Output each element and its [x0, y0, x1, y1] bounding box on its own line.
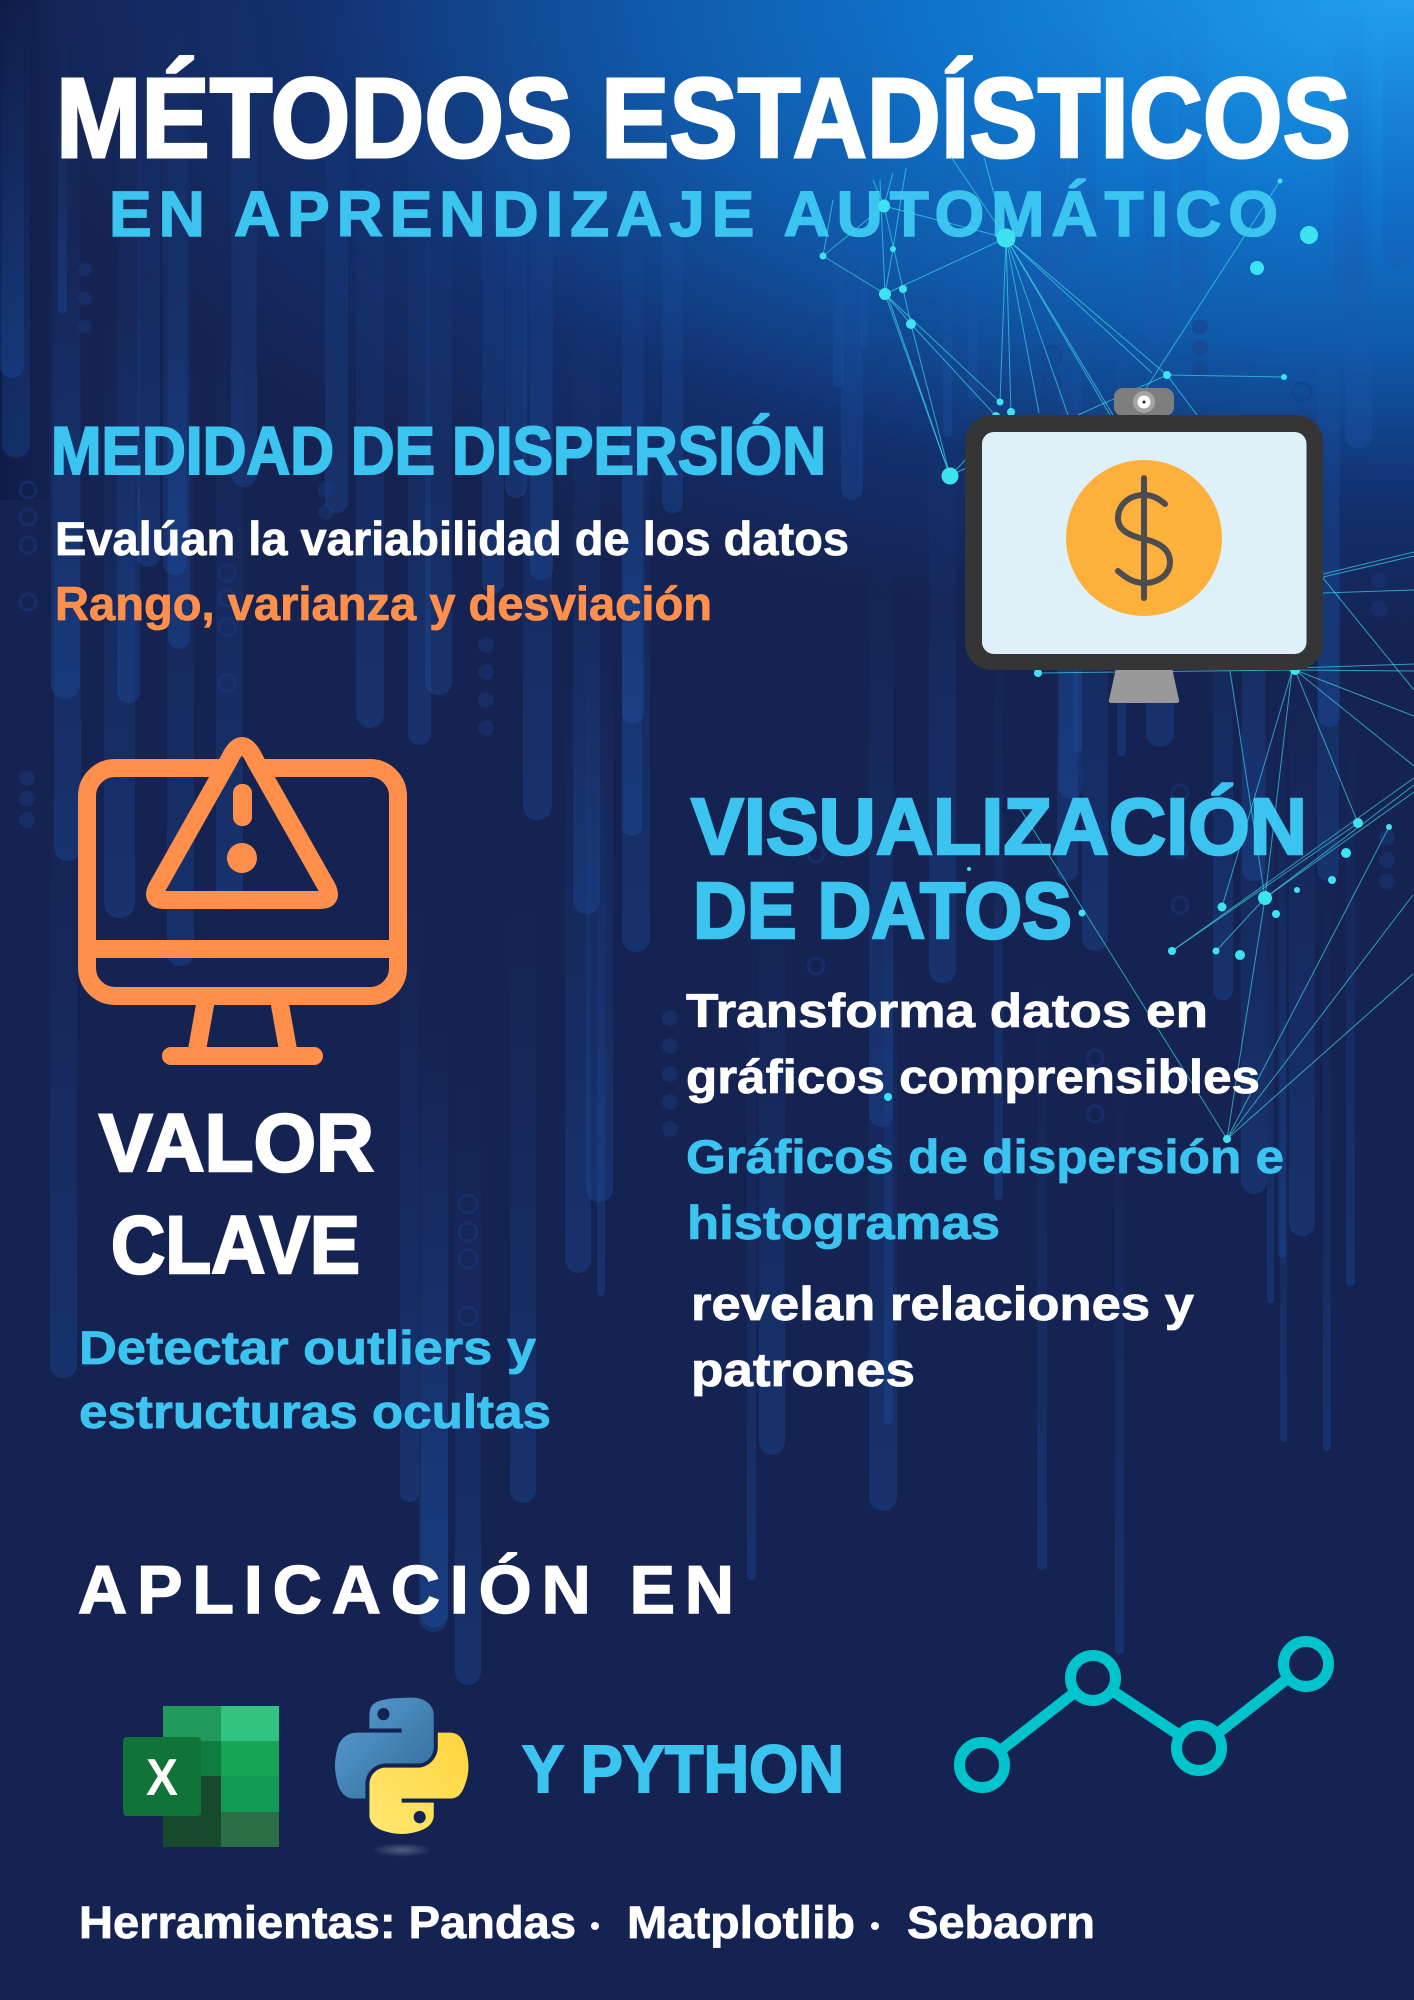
- heading: aplicación en: APLICACIÓN EN: [78, 1552, 734, 1628]
- text: revelan relaciones: revelan relaciones y: [691, 1277, 1194, 1330]
- heading: valor clave: CLAVE: [111, 1200, 360, 1291]
- monitor bar: [87, 940, 398, 958]
- text: herramientas: Matplotlib: [627, 1897, 855, 1948]
- monitor stand: [1109, 668, 1179, 703]
- heading: medida de dispersión: MEDIDAD DE DISPERSIÓN: [51, 413, 826, 489]
- heading: visualización de datos: VISUALIZACIÓN: [691, 782, 1307, 871]
- network constellation: [820, 157, 1414, 1150]
- webcam: [1114, 388, 1174, 418]
- icon: monitor with dollar coin: [965, 388, 1323, 703]
- text: transforma datos: Transforma datos en: [686, 984, 1208, 1037]
- exclamation mark: [227, 784, 257, 873]
- text: rango varianza desviación: Rango, varianza y desviación: [55, 577, 712, 630]
- dollar sign: [1118, 478, 1170, 598]
- warning triangle: [155, 746, 329, 900]
- text: transforma datos: gráficos comprensibles: [686, 1050, 1260, 1103]
- coin: [1066, 460, 1222, 616]
- icon: line chart: [960, 1642, 1328, 1788]
- text: detectar outliers: estructuras ocultas: [79, 1385, 551, 1438]
- monitor screen: [982, 432, 1306, 654]
- text: herramientas: [79, 1897, 1095, 1948]
- icon: excel: [123, 1706, 279, 1847]
- heading: visualización de datos: DE DATOS: [693, 866, 1072, 955]
- text: detectar outliers: Detectar outliers y: [79, 1321, 536, 1374]
- text: herramientas: Herramientas: Pandas: [79, 1897, 576, 1948]
- background: faint dot columns: [19, 263, 1395, 1325]
- text: gráficos de dispersión: histogramas: [687, 1196, 1000, 1249]
- text: revelan relaciones: patrones: [691, 1343, 915, 1396]
- icon: excel: X: [146, 1749, 178, 1807]
- icon: monitor with warning triangle: [87, 746, 398, 1056]
- monitor stand: [171, 1005, 314, 1056]
- subtitle: EN APRENDIZAJE AUTOMÁTICO: [109, 178, 1278, 250]
- monitor frame: [965, 415, 1323, 670]
- text: gráficos de dispersión: Gráficos de dispersión e: [686, 1130, 1284, 1183]
- text: evalúan la variabilidad: Evalúan la variabilidad de los datos: [55, 512, 849, 565]
- monitor outline: [87, 768, 398, 996]
- heading: y python: Y PYTHON: [522, 1732, 844, 1807]
- icon: python logo: [335, 1698, 468, 1857]
- heading: valor clave: VALOR: [99, 1098, 374, 1189]
- text: herramientas: Sebaorn: [907, 1897, 1095, 1948]
